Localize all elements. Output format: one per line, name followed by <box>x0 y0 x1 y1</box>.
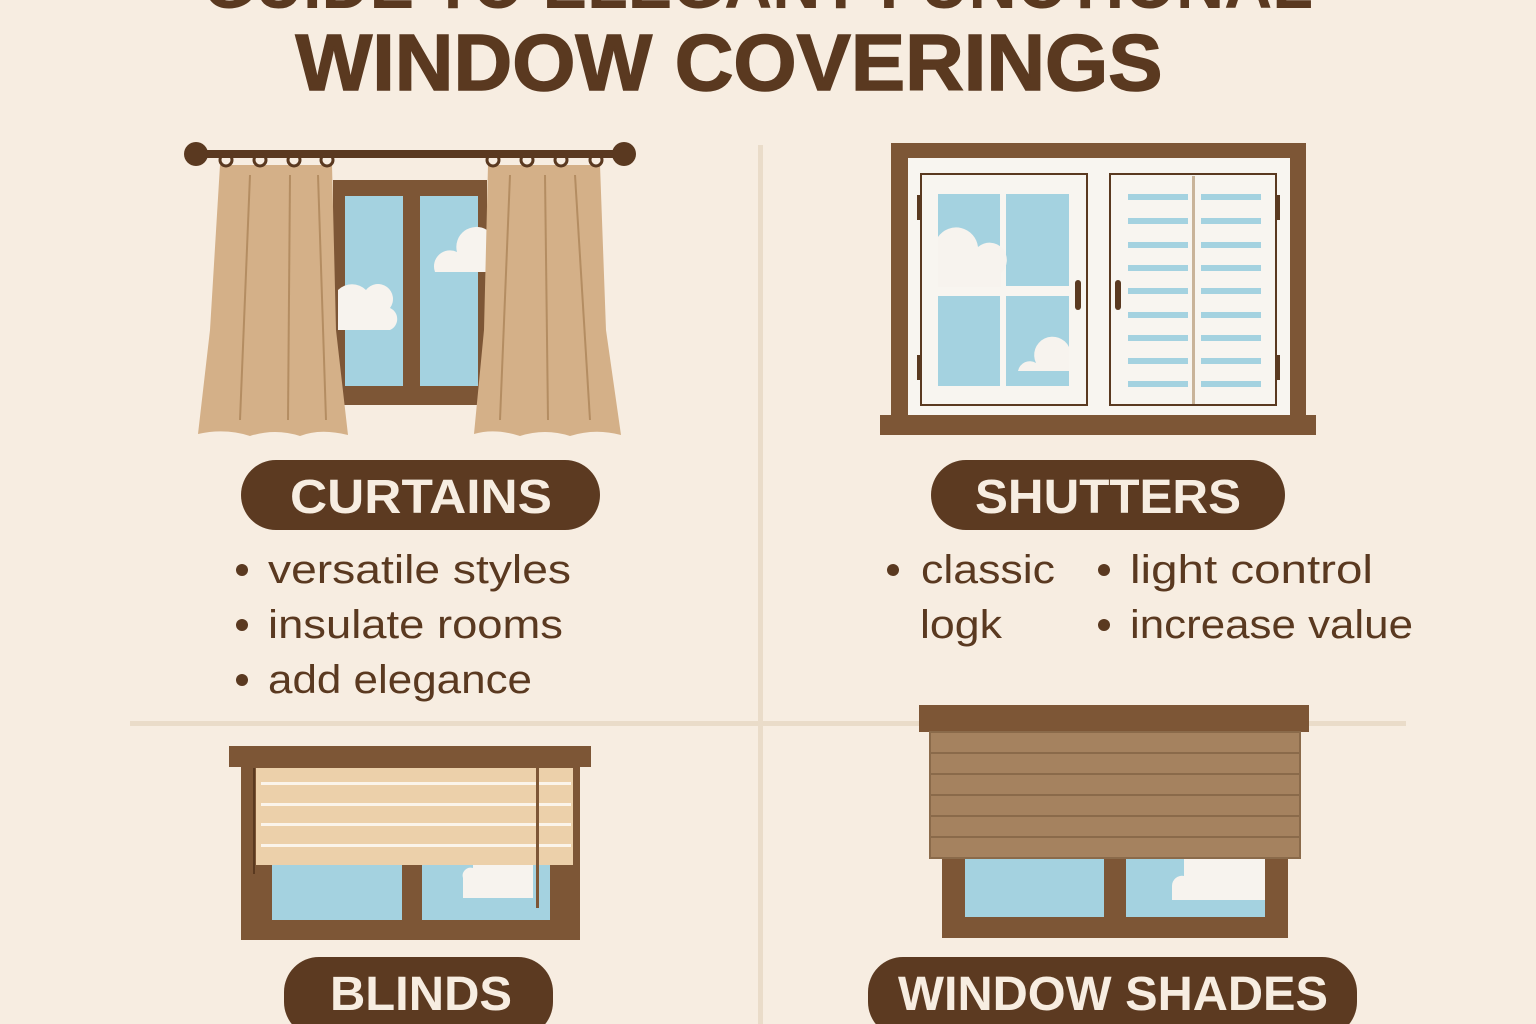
icon: curtains window <box>184 142 636 436</box>
text: curtains bullets: add elegance <box>268 658 532 702</box>
title <box>203 0 1313 107</box>
title: WINDOW COVERINGS <box>296 18 1162 107</box>
panel: blinds <box>229 746 591 1024</box>
panel: curtains <box>184 142 636 702</box>
text: shutters bullets: light control <box>1130 548 1373 592</box>
text: curtains bullets: versatile styles <box>268 548 571 592</box>
icon: shades window <box>919 705 1309 938</box>
text: shutters bullets: classic <box>921 548 1055 592</box>
heading: blinds <box>284 957 553 1024</box>
text: shutters bullets <box>887 548 1413 647</box>
heading: window shades <box>868 957 1357 1024</box>
icon: shutters window <box>880 143 1316 435</box>
panel: shutters <box>880 143 1413 647</box>
text: curtains bullets <box>236 548 571 702</box>
icon: blinds window <box>229 746 591 940</box>
heading: blinds: BLINDS <box>330 968 512 1021</box>
heading: curtains <box>241 460 600 530</box>
heading: curtains: CURTAINS <box>290 471 552 524</box>
text: curtains bullets: insulate rooms <box>268 603 563 647</box>
heading: shutters <box>931 460 1285 530</box>
text: shutters bullets: logk <box>920 603 1003 647</box>
heading: shutters: SHUTTERS <box>975 471 1241 524</box>
text: shutters bullets: increase value <box>1130 603 1413 647</box>
panel: window shades <box>868 705 1357 1024</box>
heading: window shades: WINDOW SHADES <box>898 968 1328 1021</box>
